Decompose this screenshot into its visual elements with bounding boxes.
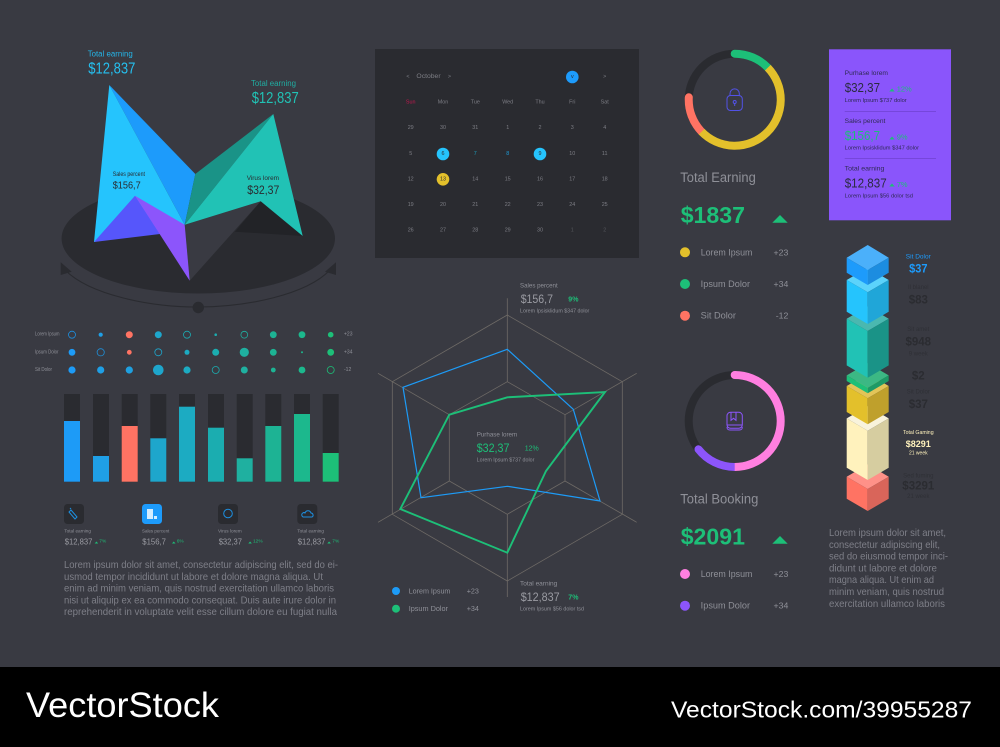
row labels: Sit Dolor bbox=[35, 367, 52, 373]
icon: lock bbox=[727, 89, 742, 110]
paragraph right: magna aliqua. Ut enim ad bbox=[829, 575, 934, 586]
label: total earning right bbox=[251, 79, 299, 107]
3D polygon chart bbox=[61, 50, 336, 313]
radar label: purhase lorem: 12% bbox=[525, 446, 539, 452]
date grid: 30 bbox=[537, 228, 543, 234]
paragraph right: Lorem ipsum dolor sit amet, bbox=[829, 528, 946, 539]
calendar header: < bbox=[406, 74, 410, 80]
radar chart bbox=[378, 298, 637, 597]
label: sales percent bbox=[113, 172, 145, 192]
paragraph left: usmod tempor incididunt ut labore et dolore magna aliqua. Ut bbox=[64, 572, 323, 583]
cube: blue bbox=[847, 245, 889, 285]
date grid: 21 bbox=[472, 202, 478, 208]
paragraph left: Lorem ipsum dolor sit amet, consectetur adipiscing elit, sed do ei- bbox=[64, 560, 338, 571]
stack labels: Sit Dolor bbox=[907, 389, 930, 395]
radar legend: +34 bbox=[467, 604, 479, 613]
date grid: 19 bbox=[408, 202, 414, 208]
date grid: 20 bbox=[440, 202, 446, 208]
date grid: 26 bbox=[408, 228, 414, 234]
summary: purhase lorem: Purhase lorem bbox=[845, 70, 888, 77]
trend arrow up bbox=[772, 536, 788, 544]
stack labels: $2 bbox=[912, 371, 925, 383]
chart base disc bbox=[62, 184, 335, 294]
purple summary panel bbox=[829, 49, 951, 220]
earning legend: +23 bbox=[774, 247, 788, 257]
radar label: total earning bbox=[520, 580, 584, 613]
radar label: sales percent: $156,7 bbox=[521, 292, 553, 306]
summary: purhase lorem bbox=[845, 70, 912, 104]
stat: total earning 1: 7% bbox=[99, 538, 107, 544]
date grid: 7 bbox=[474, 151, 477, 157]
paragraph left bbox=[64, 560, 338, 618]
label: total earning left bbox=[88, 50, 135, 78]
label: total earning left: Total earning bbox=[88, 50, 133, 58]
date grid: 18 bbox=[602, 176, 608, 182]
radar label: purhase lorem bbox=[477, 432, 539, 464]
stack labels: $83 bbox=[909, 295, 928, 307]
earning legend bbox=[680, 247, 788, 321]
isometric stacked column bbox=[847, 245, 889, 511]
row labels: Lorem Ipsum bbox=[35, 332, 60, 338]
heading: total earning: Total Earning bbox=[680, 170, 756, 185]
stack labels: $37 bbox=[909, 399, 928, 411]
summary: sales percent bbox=[845, 118, 919, 152]
value: 1837: $1837 bbox=[681, 202, 745, 228]
calendar header: v bbox=[571, 74, 574, 80]
footer logo: VectorStock bbox=[26, 686, 220, 725]
date grid: 12 bbox=[408, 176, 414, 182]
stat: sales percent: $156,7 bbox=[142, 536, 166, 546]
date grid: 16 bbox=[537, 176, 543, 182]
radar legend: Ipsum Dolor bbox=[409, 604, 449, 613]
radar label: total earning: $12,837 bbox=[521, 590, 560, 604]
weekday row bbox=[406, 99, 609, 105]
date grid: 29 bbox=[505, 228, 511, 234]
radar label: sales percent bbox=[520, 282, 590, 315]
stack labels: Sit Dolor bbox=[906, 254, 932, 260]
stat: total earning 2: 7% bbox=[332, 538, 340, 544]
radar label: sales percent: Sales percent bbox=[520, 282, 558, 290]
date grid: 28 bbox=[472, 228, 478, 234]
date grid: 22 bbox=[505, 202, 511, 208]
booking legend: +34 bbox=[774, 601, 788, 611]
label: sales percent: $156,7 bbox=[113, 180, 141, 192]
stack labels: Total Gaming bbox=[903, 430, 934, 436]
stack labels: 21 week bbox=[909, 451, 928, 457]
cube: green bbox=[847, 363, 889, 393]
radar label: sales percent: Lorem Ipsisklidum $347 dolor bbox=[520, 309, 590, 315]
date grid: 2 bbox=[603, 228, 606, 234]
date grid bbox=[408, 125, 608, 234]
stat: virus lorem: $32,37 bbox=[219, 536, 242, 546]
calendar header: > bbox=[603, 74, 606, 80]
booking legend bbox=[680, 569, 788, 611]
paragraph right: didunt ut labore et dolore bbox=[829, 564, 937, 574]
heading: total booking: Total Booking bbox=[680, 492, 758, 506]
date grid: 1 bbox=[506, 125, 509, 131]
radar legend: +23 bbox=[467, 586, 479, 596]
calendar header: October bbox=[416, 73, 441, 80]
cube: teal bbox=[847, 306, 889, 378]
paragraph right: consectetur adipiscing elit, bbox=[829, 540, 940, 551]
rotation arc with arrows bbox=[61, 262, 336, 313]
summary: purhase lorem: 12% bbox=[897, 84, 912, 94]
radar label: purhase lorem: $32,37 bbox=[477, 441, 510, 455]
value: 2091: $2091 bbox=[681, 524, 745, 550]
series: ipsum dolor bbox=[400, 392, 605, 553]
row labels: +34 bbox=[344, 349, 353, 355]
date grid: 5 bbox=[409, 151, 412, 157]
weekday row: Wed bbox=[502, 99, 513, 105]
date grid: 27 bbox=[440, 228, 446, 234]
cube: yellow bbox=[847, 374, 889, 424]
date grid: 8 bbox=[506, 151, 509, 157]
label: total earning right: Total earning bbox=[251, 79, 296, 88]
stack labels: 21 week bbox=[907, 494, 930, 500]
stack labels: Sed fuming bbox=[903, 473, 933, 479]
paragraph left: nisi ut aliquip ex ea commodo consequat. Duis aute irure dolor in bbox=[64, 596, 336, 606]
radar label: sales percent: 9% bbox=[568, 296, 579, 304]
weekday row: Thu bbox=[535, 99, 545, 105]
summary: total earning: Total earning bbox=[845, 166, 885, 172]
date grid: 9 bbox=[538, 151, 542, 157]
stack labels: Il blanel bbox=[908, 285, 929, 291]
weekday row: Fri bbox=[569, 99, 575, 105]
date grid: 17 bbox=[569, 176, 575, 182]
paragraph right: exercitation ullamco laboris bbox=[829, 599, 945, 610]
stat: sales percent: Sales percent bbox=[142, 528, 170, 534]
trend arrow up bbox=[772, 215, 788, 223]
summary: total earning: Lorem Ipsum $56 dolor tsd bbox=[845, 194, 913, 200]
stack labels: Sit amet bbox=[907, 327, 930, 333]
cube: cyan bbox=[847, 268, 889, 324]
calendar header: > bbox=[448, 74, 451, 80]
row 2 bubbles bbox=[69, 348, 334, 357]
calendar header bbox=[406, 71, 606, 83]
summary: sales percent: Sales percent bbox=[845, 118, 886, 125]
date grid: 24 bbox=[569, 202, 575, 208]
stat: virus lorem bbox=[218, 504, 263, 546]
label: virus lorem bbox=[247, 175, 279, 197]
summary: sales percent: Lorem Ipsisklidum $347 dolor bbox=[845, 146, 919, 152]
stat: sales percent bbox=[142, 504, 184, 546]
row 1 bubbles bbox=[68, 331, 334, 338]
radar label: purhase lorem: Lorem Ipsum $737 dolor bbox=[477, 458, 535, 464]
row labels: Ipsum Dolor bbox=[35, 349, 59, 355]
footer band bbox=[0, 667, 1000, 747]
date grid: 31 bbox=[472, 125, 478, 131]
cube: cream bbox=[847, 406, 889, 480]
earning legend: Sit Dolor bbox=[701, 311, 736, 321]
date grid: 13 bbox=[440, 176, 446, 182]
earning legend: -12 bbox=[776, 311, 788, 321]
weekday row: Tue bbox=[471, 99, 480, 105]
date grid: 14 bbox=[472, 176, 478, 182]
label: virus lorem: $32,37 bbox=[247, 185, 279, 197]
donut: total earning bbox=[689, 54, 781, 146]
stat: total earning 2 bbox=[297, 504, 340, 546]
label: total earning right: $12,837 bbox=[252, 90, 299, 107]
radar label: total earning: Total earning bbox=[520, 580, 558, 588]
weekday row: Mon bbox=[438, 99, 448, 105]
booking legend: +23 bbox=[774, 569, 788, 579]
stack labels: $3291 bbox=[902, 481, 935, 493]
summary: total earning: $12,837 bbox=[845, 176, 887, 190]
stack labels: 9 week bbox=[909, 351, 929, 357]
summary: total earning: 7% bbox=[897, 180, 908, 189]
summary: total earning bbox=[845, 166, 913, 200]
stat: total earning 2: $12,837 bbox=[298, 536, 326, 546]
summary: sales percent: 9% bbox=[897, 132, 908, 142]
donut: total booking bbox=[689, 371, 781, 467]
row 3 bubbles bbox=[68, 365, 334, 375]
summary: purhase lorem: Lorem Ipsum $737 dolor bbox=[845, 98, 907, 104]
cube: coral bbox=[847, 464, 889, 511]
stack labels: $948 bbox=[906, 336, 932, 348]
stat: virus lorem: 12% bbox=[253, 538, 263, 544]
stat: total earning 1: Total earning bbox=[64, 528, 91, 534]
date grid: 29 bbox=[408, 125, 414, 131]
stat: total earning 2: Total earning bbox=[297, 528, 324, 534]
booking legend: Ipsum Dolor bbox=[701, 601, 750, 611]
stat: total earning 1: $12,837 bbox=[65, 536, 93, 546]
stat: sales percent: 6% bbox=[177, 538, 184, 544]
stat: total earning 1 bbox=[64, 504, 107, 546]
paragraph left: enim ad minim veniam, quis nostrud exercitation ullamco laboris bbox=[64, 584, 334, 595]
radar label: total earning: Lorem Ipsum $56 dolor tsd bbox=[520, 607, 584, 613]
weekday row: Sun bbox=[406, 99, 415, 105]
bar chart bbox=[64, 394, 339, 482]
radar label: purhase lorem: Purhase lorem bbox=[477, 432, 517, 438]
row labels bbox=[35, 332, 353, 373]
date grid: 6 bbox=[442, 151, 444, 157]
radar label: total earning: 7% bbox=[568, 594, 579, 602]
paragraph left: reprehenderit in voluptate velit esse cillum dolore eu fugiat nulla bbox=[64, 607, 337, 618]
stack labels bbox=[902, 254, 935, 500]
date grid: 25 bbox=[602, 202, 608, 208]
date grid: 1 bbox=[571, 228, 574, 234]
earning legend: Lorem Ipsum bbox=[701, 247, 752, 257]
paragraph right bbox=[829, 528, 948, 610]
date grid: 11 bbox=[602, 151, 608, 157]
bubble matrix bbox=[35, 331, 353, 375]
icon: book bbox=[727, 412, 742, 430]
summary: sales percent: $156,7 bbox=[845, 128, 880, 143]
paragraph right: sed do eiusmod tempor inci- bbox=[829, 552, 948, 562]
calendar panel bbox=[375, 49, 639, 258]
radar legend bbox=[392, 586, 479, 613]
label: sales percent: Sales percent bbox=[113, 172, 145, 178]
summary: purhase lorem: $32,37 bbox=[845, 80, 880, 95]
date grid: 30 bbox=[440, 125, 446, 131]
date grid: 2 bbox=[538, 125, 542, 131]
earning legend: +34 bbox=[774, 279, 788, 289]
label: virus lorem: Virus lorem bbox=[247, 175, 279, 182]
stack labels: $37 bbox=[909, 264, 927, 276]
paragraph right: minim veniam, quis nostrud bbox=[829, 587, 944, 598]
stack labels: $8291 bbox=[906, 439, 931, 449]
radar legend: Lorem Ipsum bbox=[409, 586, 450, 596]
footer url: VectorStock.com/39955287 bbox=[671, 697, 972, 723]
date grid: 10 bbox=[569, 151, 575, 157]
date grid: 15 bbox=[505, 176, 511, 182]
stat: virus lorem: Virus lorem bbox=[218, 528, 242, 534]
booking legend: Lorem Ipsum bbox=[701, 569, 752, 579]
earning legend: Ipsum Dolor bbox=[701, 279, 750, 289]
weekday row: Sat bbox=[601, 99, 609, 105]
label: total earning left: $12,837 bbox=[88, 60, 135, 78]
date grid: 23 bbox=[537, 202, 543, 208]
row labels: -12 bbox=[344, 367, 351, 373]
date grid: 3 bbox=[571, 125, 574, 131]
row labels: +23 bbox=[344, 332, 353, 338]
series: lorem ipsum bbox=[403, 349, 600, 501]
date grid: 4 bbox=[603, 125, 606, 131]
